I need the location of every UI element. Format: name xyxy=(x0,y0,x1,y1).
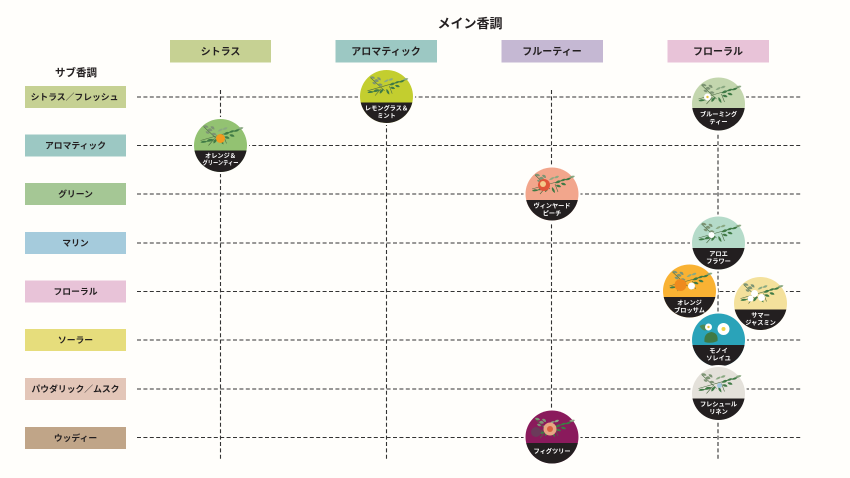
scent badge: fraiche linen: リネン xyxy=(709,408,728,416)
scent badge: summer jasmine: ジャスミン xyxy=(745,320,776,327)
column header: aromatic: アロマティック xyxy=(351,46,421,58)
title: main accord: メイン香調 xyxy=(437,16,503,31)
column header: citrus xyxy=(170,40,271,62)
scent badge: orange & green tea: グリーンティー xyxy=(202,159,238,167)
row label: citrus fresh xyxy=(25,86,126,108)
row label: green xyxy=(25,183,126,205)
row label: woody xyxy=(25,427,126,449)
scent badge: lemongrass & mint xyxy=(358,68,415,125)
scent badge: orange & green tea: オレンジ＆ xyxy=(205,153,236,160)
scent badge: orange blossom xyxy=(661,262,718,320)
scent badge: monoi soleil: ソレイユ xyxy=(706,356,731,362)
row label: green: グリーン xyxy=(58,188,93,199)
scent badge: lemongrass & mint: レモングラス＆ xyxy=(365,104,408,112)
row label: aromatic xyxy=(25,134,126,156)
column header: fruity: フルーティー xyxy=(522,46,582,58)
row label: powdery musk: パウダリック／ムスク xyxy=(32,383,119,394)
row label: marine xyxy=(25,232,126,254)
row label: solar xyxy=(25,329,126,351)
row label: solar: ソーラー xyxy=(58,335,93,345)
dashed matrix grid xyxy=(137,90,801,460)
scent badge: aloe flower: アロエ xyxy=(709,251,728,258)
row label: powdery musk xyxy=(25,378,126,400)
scent badge: summer jasmine xyxy=(734,277,787,330)
scent badge: blooming tea xyxy=(690,76,747,132)
scent badge: blooming tea: ブルーミング xyxy=(700,110,738,118)
row label: woody: ウッディー xyxy=(54,432,97,443)
subtitle: sub accord: サブ香調 xyxy=(55,66,97,79)
row label: marine: マリン xyxy=(62,238,89,248)
scent badge: fraiche linen: フレシュール xyxy=(700,402,737,408)
column header: aromatic xyxy=(336,40,437,62)
column header: floral xyxy=(668,40,769,62)
row label: floral: フローラル xyxy=(54,287,98,297)
scent badge: orange & green tea xyxy=(192,117,249,174)
scent badge: blooming tea: ティー xyxy=(709,119,728,126)
scent badge: summer jasmine: サマー xyxy=(751,312,770,320)
column headers xyxy=(170,40,769,62)
scent badge: orange blossom: オレンジ xyxy=(677,300,702,307)
row labels xyxy=(25,86,126,449)
scent badge: vineyard peach xyxy=(524,166,580,222)
scent badge: vineyard peach: ヴィンヤード xyxy=(533,202,571,210)
scent badge: monoi soleil: モノイ xyxy=(709,348,728,355)
column header: floral: フローラル xyxy=(693,46,743,58)
row label: floral xyxy=(25,280,126,302)
scent badge: aloe flower: フラワー xyxy=(706,258,731,266)
scent badge: aloe flower xyxy=(690,214,747,272)
column header: fruity xyxy=(502,40,603,62)
scent badge: vineyard peach: ピーチ xyxy=(543,210,561,218)
scent badge: fig tree xyxy=(524,408,580,466)
row label: citrus fresh: シトラス／フレッシュ xyxy=(31,92,118,102)
scent badge: lemongrass & mint: ミント xyxy=(377,113,396,120)
scent badge: orange blossom: ブロッサム xyxy=(674,306,705,314)
column header: citrus: シトラス xyxy=(201,46,240,58)
row label: aromatic: アロマティック xyxy=(45,141,106,151)
scent badge: monoi soleil xyxy=(690,312,747,368)
scent badge: fraiche linen xyxy=(690,365,747,422)
scent badge: fig tree: フィグツリー xyxy=(533,448,571,456)
